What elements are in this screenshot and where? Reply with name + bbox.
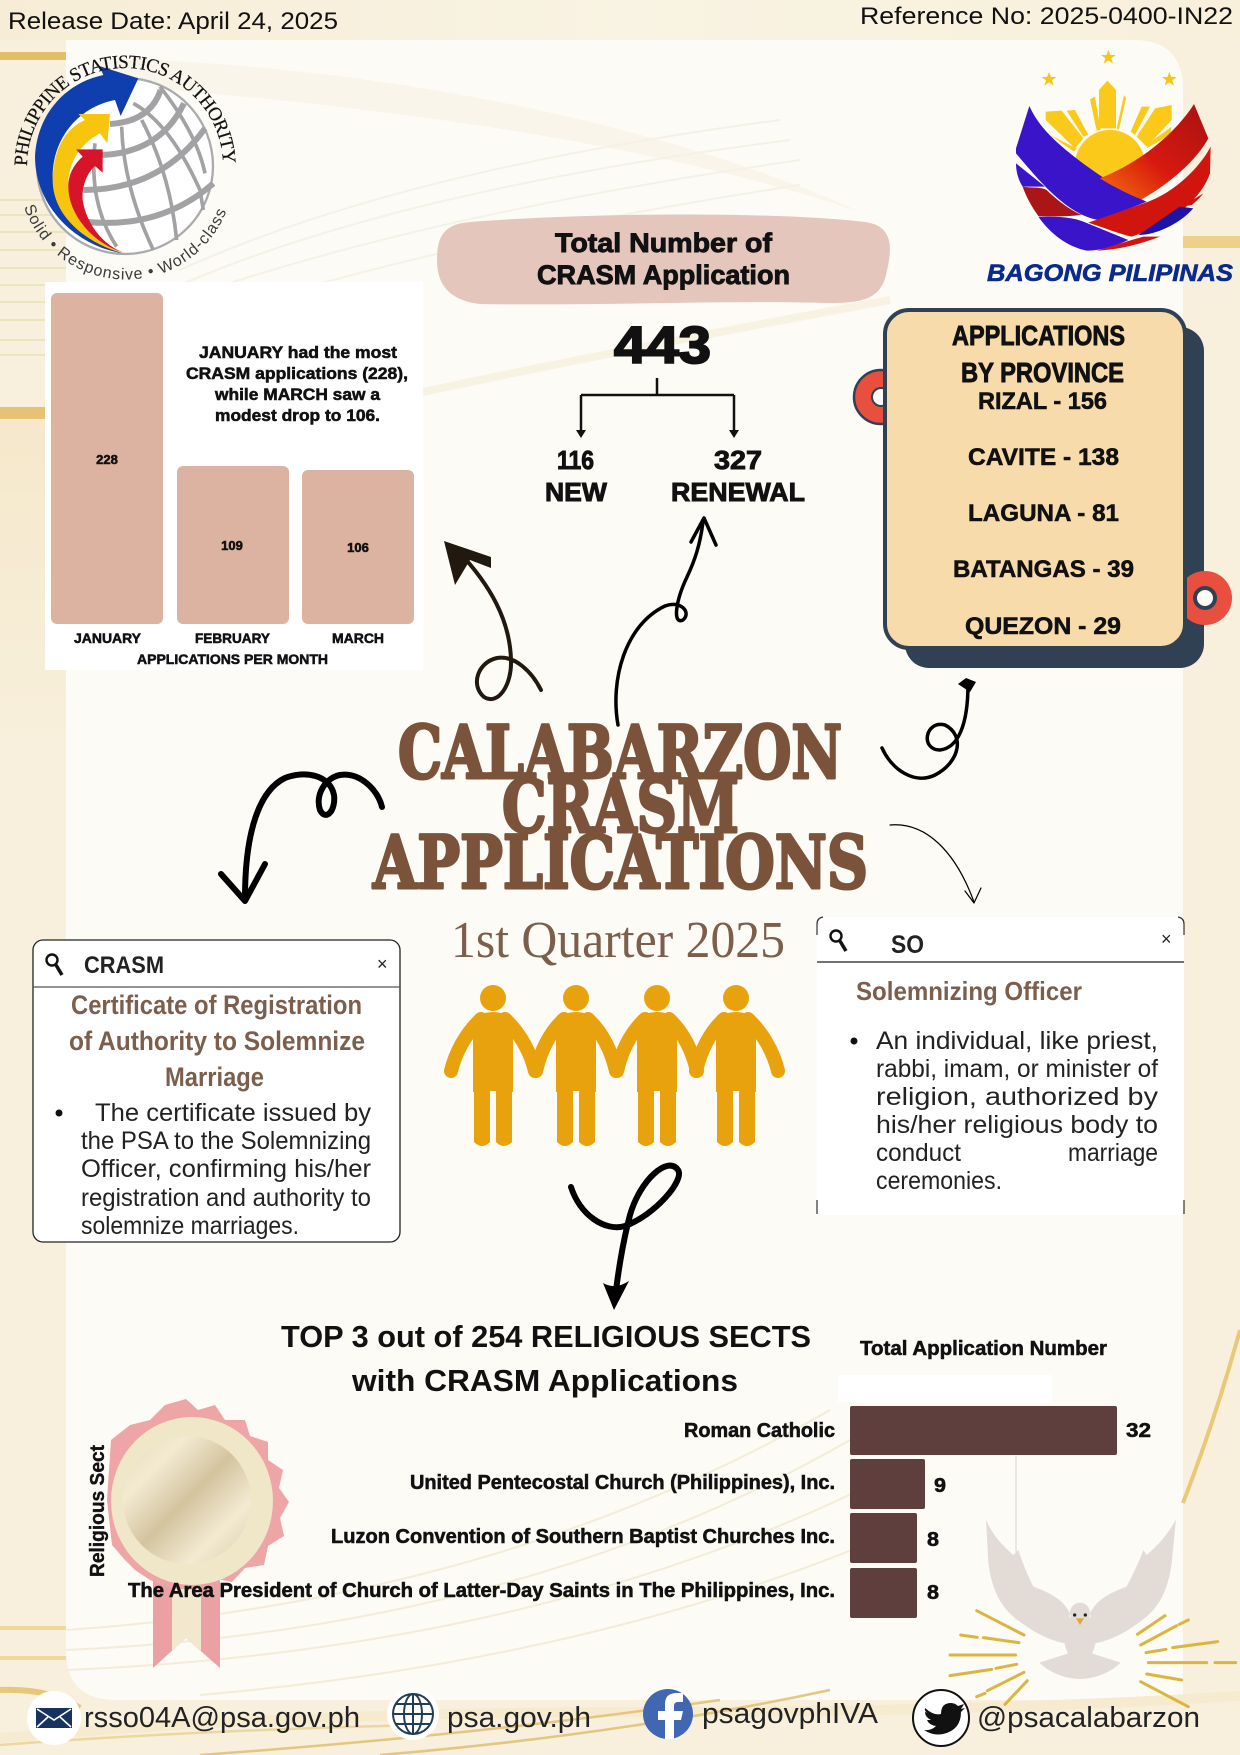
website: psa.gov.ph bbox=[447, 1702, 591, 1734]
bracket arrows: new and renewal bbox=[576, 378, 739, 438]
month labels: FEBRUARY bbox=[195, 630, 271, 646]
chart note bbox=[186, 344, 408, 425]
definition text: the PSA to the Solemnizing bbox=[81, 1127, 371, 1155]
renewal count bbox=[671, 445, 805, 507]
email address: rsso04A@psa.gov.ph bbox=[84, 1702, 360, 1734]
definition text: An individual, like priest, bbox=[876, 1027, 1158, 1055]
chart note: while MARCH saw a bbox=[214, 386, 381, 404]
ring: left bbox=[854, 370, 908, 424]
PSA logo bbox=[14, 55, 236, 280]
bar chart: religious sects bbox=[128, 1338, 1151, 1620]
axis label: religious sect: Religious Sect bbox=[87, 1445, 109, 1577]
definition text: marriage bbox=[1068, 1139, 1158, 1167]
row: Latter-Day Saints: 8 bbox=[927, 1582, 939, 1604]
new count: 116 bbox=[557, 445, 594, 475]
province: Cavite: CAVITE - 138 bbox=[968, 444, 1119, 471]
facebook handle: psagovphIVA bbox=[702, 1698, 879, 1730]
sun bbox=[1046, 81, 1172, 200]
new count bbox=[545, 445, 607, 507]
definition text: registration and authority to bbox=[81, 1184, 371, 1212]
card shadow bbox=[905, 327, 1204, 668]
definition heading: Solemnizing Officer bbox=[856, 976, 1082, 1006]
row: Luzon Convention bbox=[331, 1513, 939, 1563]
ribbon tails bbox=[153, 1570, 220, 1668]
search term: SO bbox=[891, 931, 924, 959]
row: United Pentecostal: 9 bbox=[934, 1475, 946, 1497]
total heading blob bbox=[437, 214, 890, 304]
panel: applications by province bbox=[854, 310, 1232, 668]
month labels bbox=[74, 630, 384, 646]
arrow: to CRASM card bbox=[221, 774, 382, 901]
main title: CALABARZON bbox=[398, 710, 842, 796]
row: Latter-Day Saints bbox=[128, 1568, 939, 1618]
definition heading: Marriage bbox=[165, 1062, 264, 1092]
total heading blob: Total Number of bbox=[555, 228, 773, 258]
arrow: to monthly chart bbox=[444, 541, 541, 699]
definition heading: Certificate of Registration bbox=[71, 990, 362, 1020]
card face bbox=[885, 310, 1185, 648]
section title: top religious sects: TOP 3 out of 254 RELIGIOUS SECTS bbox=[281, 1319, 811, 1354]
twitter handle: @psacalabarzon bbox=[977, 1702, 1200, 1734]
icon: medal bbox=[107, 1399, 289, 1668]
panel: monthly bar chart bbox=[45, 282, 423, 670]
icon: website globe bbox=[387, 1688, 439, 1740]
stars bbox=[1042, 50, 1177, 86]
axis title: APPLICATIONS PER MONTH bbox=[137, 651, 328, 667]
chart header: Total Application Number bbox=[860, 1338, 1107, 1360]
row: Roman Catholic: 32 bbox=[1126, 1420, 1151, 1442]
province: Laguna: LAGUNA - 81 bbox=[968, 500, 1119, 527]
section title: top religious sects: with CRASM Applications bbox=[351, 1363, 738, 1398]
row: Roman Catholic: Roman Catholic bbox=[684, 1420, 835, 1442]
icon: facebook bbox=[643, 1689, 693, 1739]
panel: CRASM definition bbox=[33, 940, 400, 1242]
chart note: JANUARY had the most bbox=[199, 344, 398, 362]
footer: contact details bbox=[27, 1688, 1200, 1746]
definition text: his/her religious body to bbox=[876, 1111, 1158, 1139]
icon: four people holding hands bbox=[451, 985, 778, 1146]
icon: email bbox=[27, 1691, 81, 1745]
arrow: to SO card bbox=[890, 825, 981, 903]
close mark: × bbox=[1161, 929, 1172, 949]
definition text: rabbi, imam, or minister of bbox=[876, 1055, 1158, 1083]
section title: top religious sects bbox=[281, 1319, 811, 1398]
chart note: CRASM applications (228), bbox=[186, 365, 408, 383]
definition text bbox=[56, 1099, 372, 1240]
search term: CRASM bbox=[84, 952, 164, 979]
row: United Pentecostal: United Pentecostal Church (Philippines), Inc. bbox=[410, 1472, 835, 1494]
icon: twitter bbox=[913, 1690, 969, 1746]
subtitle: 1st Quarter 2025 bbox=[451, 912, 785, 969]
total heading blob: CRASM Application bbox=[537, 260, 790, 290]
dove bbox=[986, 1519, 1176, 1679]
chart note: modest drop to 106. bbox=[215, 407, 380, 425]
panel: SO definition bbox=[817, 917, 1184, 1215]
icon: dove with rays bbox=[950, 1519, 1236, 1707]
definition text: conduct bbox=[876, 1139, 961, 1167]
definition heading bbox=[69, 990, 365, 1092]
reference number: Reference No: 2025-0400-IN22 bbox=[860, 3, 1233, 30]
province: Quezon: QUEZON - 29 bbox=[965, 613, 1121, 640]
card title: BY PROVINCE bbox=[961, 357, 1124, 388]
bar: February: 109 bbox=[221, 538, 243, 553]
total number: 443 bbox=[614, 317, 711, 375]
arrow: to renewal bbox=[616, 518, 716, 725]
row: Roman Catholic bbox=[684, 1406, 1151, 1455]
new count: NEW bbox=[545, 477, 607, 507]
definition heading: of Authority to Solemnize bbox=[69, 1026, 365, 1056]
flag ribbons bbox=[1016, 106, 1147, 220]
main title: CRASM bbox=[502, 764, 739, 850]
brand wordmark: BAGONG PILIPINAS bbox=[987, 260, 1233, 287]
globe and arrows bbox=[35, 66, 213, 254]
definition text: solemnize marriages. bbox=[81, 1212, 299, 1240]
renewal count: 327 bbox=[714, 445, 762, 475]
icon: search bbox=[46, 954, 62, 975]
month labels: JANUARY bbox=[74, 630, 142, 646]
bar: March bbox=[302, 470, 414, 624]
bar: March: 106 bbox=[347, 540, 369, 555]
definition text: ceremonies. bbox=[876, 1167, 1002, 1195]
bar: January bbox=[51, 293, 163, 624]
ring: right bbox=[1178, 571, 1232, 625]
gold disc bbox=[111, 1417, 273, 1585]
rosette bbox=[107, 1399, 289, 1590]
icon: search bbox=[830, 930, 846, 951]
definition text: Officer, confirming his/her bbox=[81, 1155, 371, 1183]
rays bbox=[950, 1611, 1236, 1707]
arrow: to religious sects bbox=[571, 1166, 679, 1310]
main title bbox=[372, 710, 868, 906]
card title bbox=[952, 320, 1125, 388]
Bagong Pilipinas logo bbox=[987, 50, 1233, 287]
logo ring text: PHILIPPINE STATISTICS AUTHORITY bbox=[14, 55, 236, 166]
row: United Pentecostal bbox=[410, 1459, 946, 1509]
definition text bbox=[850, 1027, 1159, 1195]
province: Rizal: RIZAL - 156 bbox=[978, 388, 1107, 415]
province: Batangas: BATANGAS - 39 bbox=[953, 556, 1134, 583]
renewal count: RENEWAL bbox=[671, 477, 805, 507]
definition text: religion, authorized by bbox=[876, 1083, 1159, 1111]
bar: January: 228 bbox=[96, 452, 118, 467]
card title: APPLICATIONS bbox=[952, 320, 1125, 351]
bar: February bbox=[177, 466, 289, 624]
close mark: × bbox=[377, 954, 388, 974]
footer swoosh band bbox=[0, 1330, 1240, 1755]
logo motto: Solid • Responsive • World-class bbox=[25, 204, 226, 280]
release date: Release Date: April 24, 2025 bbox=[8, 8, 338, 35]
arrow: to province card bbox=[882, 678, 976, 778]
month labels: MARCH bbox=[332, 630, 384, 646]
definition text: The certificate issued by bbox=[95, 1099, 372, 1127]
row: Latter-Day Saints: The Area President of Church of Latter-Day Saints in The Philippines, Inc. bbox=[128, 1580, 835, 1602]
row: Luzon Convention: Luzon Convention of Southern Baptist Churches Inc. bbox=[331, 1526, 835, 1548]
main title: APPLICATIONS bbox=[372, 820, 868, 906]
row: Luzon Convention: 8 bbox=[927, 1529, 939, 1551]
